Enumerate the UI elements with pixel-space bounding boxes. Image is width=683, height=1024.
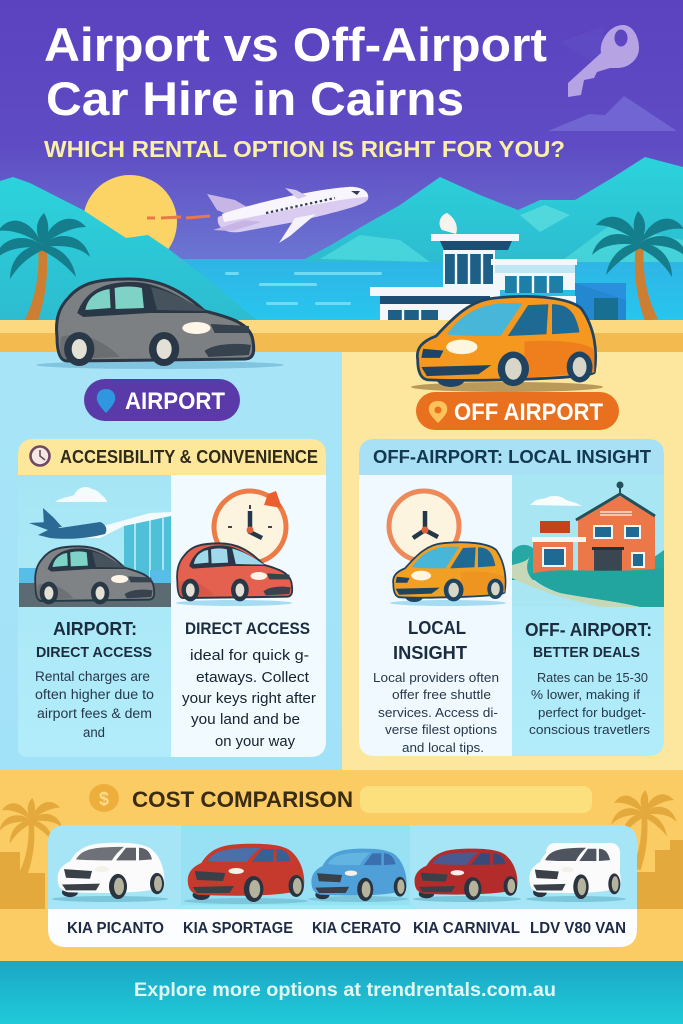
body text: on your way	[215, 734, 296, 750]
icon: dollar coin	[89, 784, 119, 812]
vehicle: ldv v80 van: LDV V80 VAN	[530, 920, 626, 937]
cell: direct access	[171, 475, 326, 757]
subheading: better deals: BETTER DEALS	[533, 644, 640, 661]
body text: Local providers often	[373, 670, 499, 685]
card: accessibility and convenience	[18, 439, 326, 757]
body text: perfect for budget-	[538, 705, 646, 720]
card heading: OFF-AIRPORT: LOCAL INSIGHT	[373, 446, 652, 467]
vehicle: kia carnival: KIA CARNIVAL	[413, 920, 520, 937]
body text	[529, 670, 651, 737]
body text: and local tips.	[402, 740, 484, 755]
ground sand	[0, 320, 683, 352]
badge label: off airport: OFF AIRPORT	[454, 399, 603, 426]
right mountains	[305, 157, 683, 262]
icon: header clock	[30, 446, 50, 466]
card heading: ACCESIBILITY & CONVENIENCE	[60, 447, 318, 467]
body text: often higher due to	[35, 687, 154, 702]
icon: mountain silhouette	[548, 96, 677, 131]
hero scene background	[0, 0, 683, 352]
illustration: terminal and grey car	[19, 487, 171, 607]
palm left	[0, 798, 63, 874]
heading: local insight: LOCAL	[408, 618, 466, 638]
icon: dollar coin: $	[99, 789, 109, 809]
cell: better deals	[512, 475, 664, 756]
vehicle: ldv v80 van	[526, 843, 626, 937]
section heading: COST COMPARISON	[132, 787, 353, 812]
icon: key	[560, 25, 639, 97]
vehicle: kia sportage: KIA SPORTAGE	[183, 920, 293, 937]
heading: local insight: INSIGHT	[393, 643, 467, 663]
city skyline left	[0, 852, 45, 909]
subheading: direct access: DIRECT ACCESS	[36, 644, 152, 661]
city skyline right	[630, 840, 683, 909]
body text: % lower, making if	[531, 687, 640, 702]
vehicle: kia picanto: KIA PICANTO	[67, 920, 164, 937]
airport terminal	[370, 213, 626, 333]
title: Airport vs Off-Airport	[44, 18, 547, 71]
body text: you land and be	[191, 712, 300, 728]
body text: and	[83, 725, 105, 740]
panel: cost comparison	[0, 770, 683, 961]
heading: off-airport: OFF- AIRPORT:	[525, 620, 652, 640]
left mountain	[0, 177, 257, 320]
body text	[35, 669, 154, 740]
panel: off airport	[342, 352, 683, 770]
heading: airport: AIRPORT:	[53, 619, 137, 639]
body text: ideal for quick g-	[190, 648, 309, 664]
body text: your keys right after	[182, 691, 316, 707]
footer band	[0, 961, 683, 1024]
body text: services. Access di-	[378, 705, 498, 720]
palm right	[611, 790, 677, 870]
empty highlight bar	[360, 786, 592, 813]
panel: airport	[0, 352, 342, 770]
icon: blue pin	[97, 389, 115, 413]
sun	[83, 175, 177, 269]
vehicle: kia carnival	[413, 849, 521, 937]
sea ripples	[225, 272, 382, 305]
vehicle: kia cerato: KIA CERATO	[312, 920, 401, 937]
palm tree right	[592, 211, 683, 321]
badge: off airport	[416, 392, 619, 430]
cell: airport direct access	[18, 475, 171, 757]
vehicle: kia picanto	[52, 843, 168, 937]
subtitle: WHICH RENTAL OPTION IS RIGHT FOR YOU?	[44, 136, 565, 162]
card: off-airport local insight	[359, 439, 664, 756]
body text	[182, 648, 316, 750]
vehicle panel	[48, 825, 637, 947]
footer call to action: Explore more options at trendrentals.com.au	[134, 980, 556, 1001]
body text: etaways. Collect	[196, 670, 309, 686]
body text: Rates can be 15-30	[537, 670, 648, 685]
sea	[0, 259, 683, 321]
heading: local insight	[393, 618, 467, 663]
body text	[373, 670, 499, 755]
vehicle: kia cerato	[308, 849, 408, 937]
icon: plane	[147, 187, 368, 243]
heading: direct access: DIRECT ACCESS	[185, 619, 310, 638]
body text: offer free shuttle	[392, 687, 491, 702]
illustration: clock and orange car	[389, 491, 506, 606]
icon: orange car	[411, 296, 603, 392]
badge: airport	[84, 379, 240, 421]
illustration: clock and red car	[176, 491, 292, 606]
body text: conscious travetlers	[529, 722, 651, 737]
palm tree left	[0, 213, 90, 323]
icon: yellow pin	[429, 401, 447, 423]
badge label: airport: AIRPORT	[125, 388, 225, 415]
cell: local insight	[359, 475, 512, 756]
body text: Rental charges are	[35, 669, 150, 684]
body text: verse filest options	[385, 722, 498, 737]
title: Car Hire in Cairns	[46, 72, 464, 125]
icon: grey car	[36, 279, 284, 369]
vehicle: kia sportage	[183, 844, 308, 937]
illustration: local branch house	[512, 475, 664, 607]
body text: airport fees & dem	[37, 706, 152, 721]
title	[44, 18, 547, 125]
